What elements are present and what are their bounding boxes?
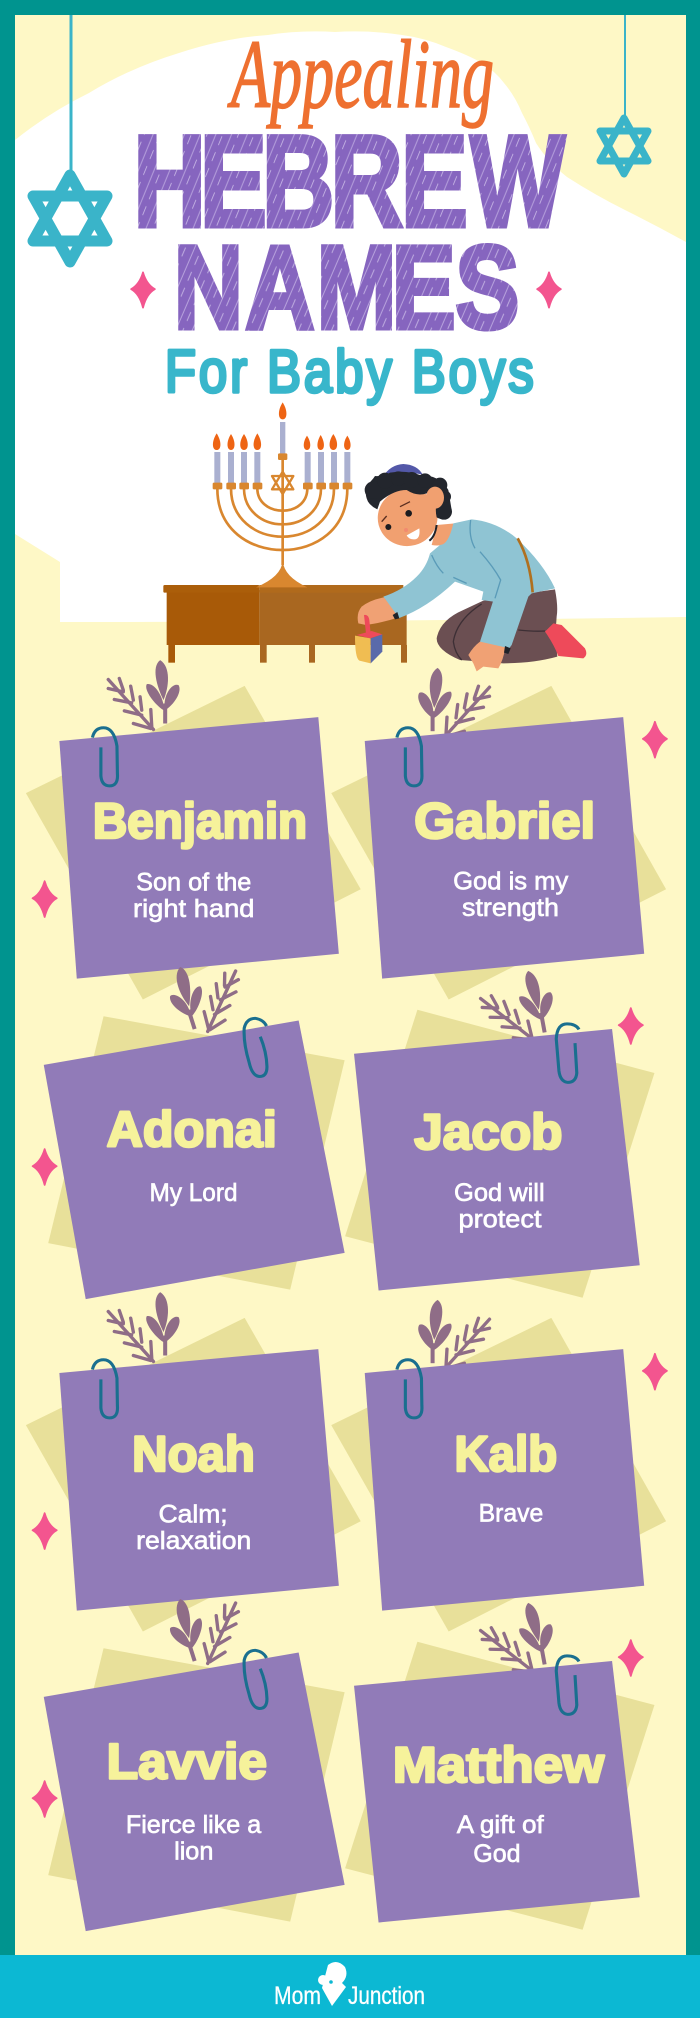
icon: sparkle left of title bbox=[131, 272, 155, 308]
sparkle near Matthew bbox=[619, 1640, 643, 1676]
panel: Jacob: Jacob bbox=[414, 1103, 563, 1160]
panel: Lavvie: lion bbox=[174, 1838, 213, 1866]
footer logo bbox=[274, 1962, 425, 2010]
boy playing with dreidel bbox=[355, 464, 586, 671]
sparkle near Adonai bbox=[33, 1149, 57, 1185]
panel: Noah: Noah bbox=[132, 1425, 255, 1482]
footer band bbox=[0, 1955, 700, 2018]
panel: Gabriel: God is my bbox=[453, 868, 569, 895]
panel: Benjamin: Son of the bbox=[136, 869, 251, 896]
trouser creases bbox=[453, 604, 545, 660]
panel: Noah: relaxation bbox=[136, 1528, 251, 1555]
sparkle near Kalb bbox=[643, 1354, 667, 1390]
sparkle near Lavvie bbox=[33, 1781, 57, 1817]
panel: Matthew: A gift of bbox=[457, 1812, 545, 1839]
panel: Lavvie bbox=[44, 1585, 345, 1931]
sparkle near Benjamin bbox=[33, 881, 57, 917]
sparkle near Gabriel bbox=[643, 722, 667, 758]
shoe bbox=[545, 623, 586, 658]
right hand bbox=[468, 642, 505, 671]
cuffs bbox=[393, 612, 511, 654]
panel: Noah bbox=[26, 1292, 361, 1632]
left hand bbox=[358, 597, 399, 625]
icon: mother and child bbox=[318, 1962, 346, 2006]
neck bbox=[432, 523, 455, 545]
head bbox=[365, 464, 452, 553]
icon: left hanging star bbox=[33, 15, 107, 262]
panel: Benjamin bbox=[26, 660, 361, 1000]
trousers bbox=[437, 589, 557, 663]
icon: right hanging star bbox=[600, 15, 648, 174]
panel: Jacob bbox=[345, 968, 654, 1298]
panel: Kalb bbox=[331, 1300, 666, 1632]
menorah bbox=[213, 402, 352, 587]
panel: Lavvie: Fierce like a bbox=[126, 1812, 262, 1839]
panel: Gabriel: strength bbox=[462, 895, 559, 922]
table bbox=[163, 585, 407, 663]
panel: Noah: Calm; bbox=[158, 1501, 228, 1528]
panel: Gabriel bbox=[331, 668, 666, 1000]
logo wordmark: Junction: Junction bbox=[348, 1982, 425, 2010]
title: NAMES: NAMES bbox=[174, 221, 519, 353]
panel: Adonai: Adonai bbox=[107, 1101, 277, 1157]
shirt bbox=[383, 519, 555, 652]
logo wordmark: Mom: Mom bbox=[274, 1982, 321, 2010]
shirt fold lines bbox=[432, 520, 501, 598]
panel: Kalb: Kalb bbox=[454, 1425, 557, 1482]
panel: Kalb: Brave bbox=[479, 1500, 543, 1527]
panel: Matthew: Matthew bbox=[393, 1736, 605, 1793]
icon: sparkle right of title bbox=[537, 272, 561, 308]
panel: Benjamin: right hand bbox=[133, 896, 254, 923]
panel: Matthew bbox=[345, 1600, 654, 1930]
sparkle near Noah bbox=[33, 1513, 57, 1549]
panel: Jacob: protect bbox=[458, 1206, 542, 1234]
panel: Jacob: God will bbox=[454, 1180, 545, 1207]
title: HEBREW: HEBREW bbox=[134, 108, 565, 254]
panel: Matthew: God bbox=[473, 1840, 521, 1868]
table with menorah bbox=[163, 402, 407, 663]
panel: Benjamin: Benjamin bbox=[93, 792, 307, 849]
panel: Lavvie: Lavvie bbox=[107, 1733, 267, 1789]
white background blob bbox=[15, 31, 686, 622]
panel: Adonai: My Lord bbox=[150, 1180, 238, 1207]
dreidel bbox=[355, 615, 382, 663]
suspender bbox=[518, 538, 533, 592]
subtitle: For Baby Boys: For Baby Boys bbox=[165, 338, 534, 405]
sparkle near Jacob bbox=[619, 1008, 643, 1044]
cards rows one and two bbox=[26, 660, 667, 1299]
panel: Adonai bbox=[44, 953, 345, 1299]
cards rows three and four bbox=[26, 1292, 667, 1931]
title: Appealing: Appealing bbox=[227, 21, 494, 129]
panel: Gabriel: Gabriel bbox=[414, 792, 595, 849]
